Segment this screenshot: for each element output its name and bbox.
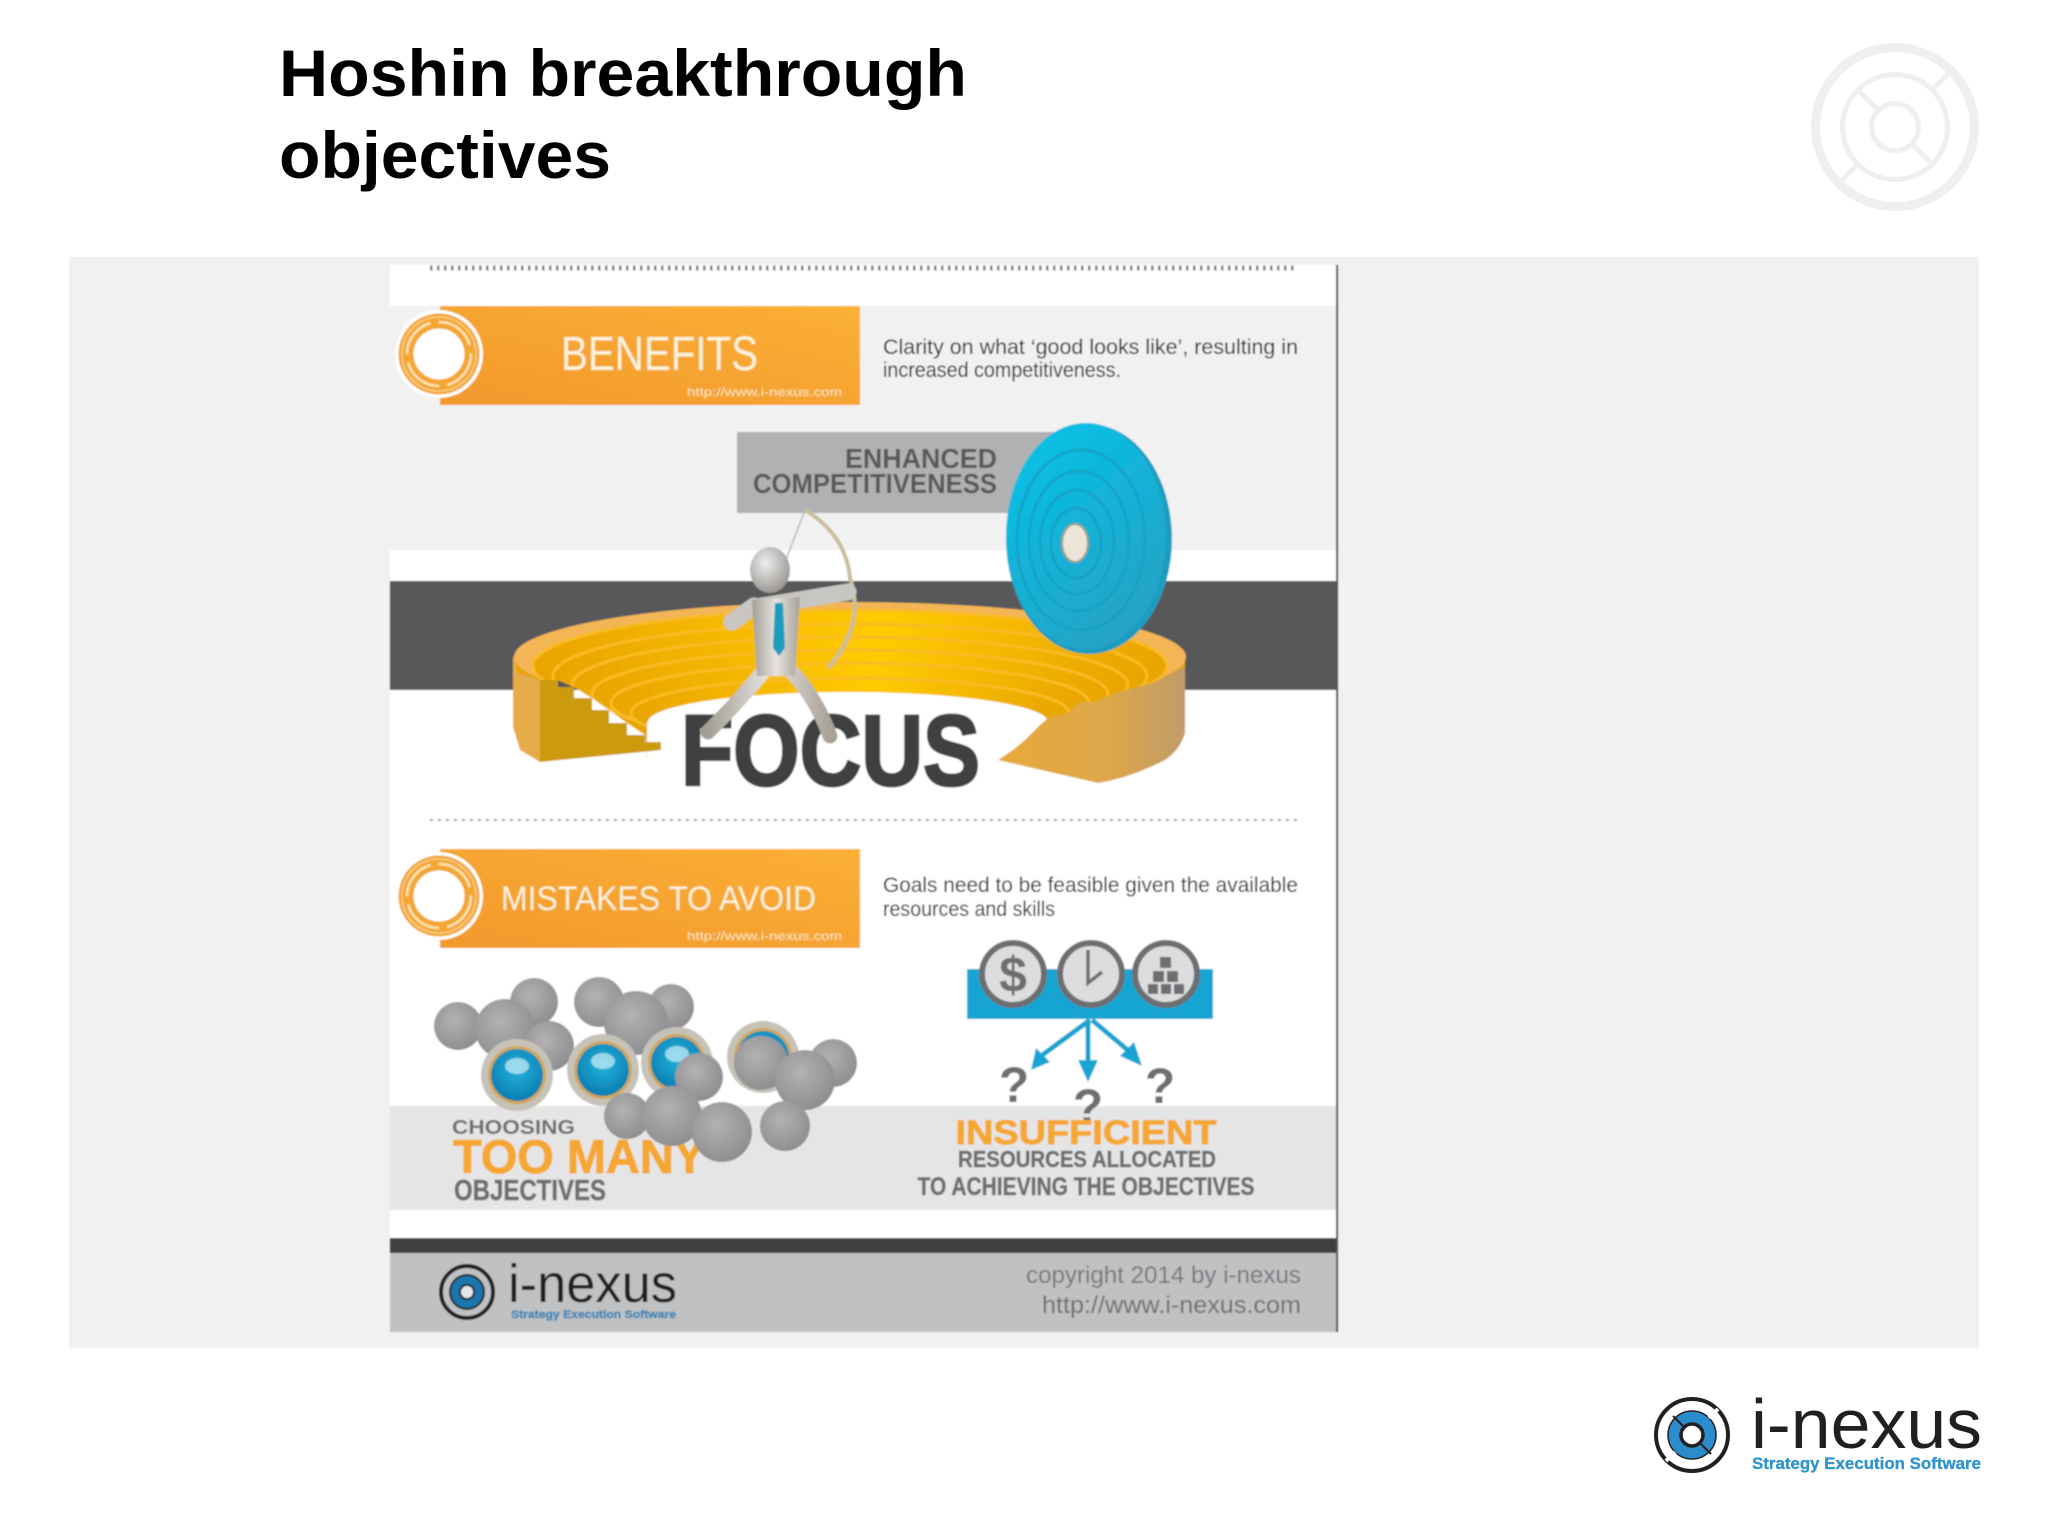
question marks: ? xyxy=(999,1057,1029,1113)
bow string xyxy=(784,510,805,565)
back spheres xyxy=(434,977,694,1071)
blue resource bar xyxy=(967,969,1213,1019)
benefits heading: BENEFITS xyxy=(561,328,758,381)
choosing too many objectives caption: CHOOSING xyxy=(452,1117,575,1139)
mistakes description: Goals need to be feasible given the available xyxy=(883,874,1298,897)
arena left cut face xyxy=(540,680,661,762)
dark focus band xyxy=(390,581,1337,690)
copyright text xyxy=(1026,1262,1301,1319)
choosing too many objectives caption: TOO MANY xyxy=(453,1130,705,1183)
copyright text: http://www.i-nexus.com xyxy=(1042,1292,1301,1319)
panel: grey slide backdrop xyxy=(69,257,1979,1348)
icon: stacked blocks xyxy=(1135,943,1197,1005)
insufficient resources caption: RESOURCES ALLOCATED xyxy=(958,1146,1216,1172)
enhanced competitiveness label: COMPETITIVENESS xyxy=(753,468,997,499)
mistakes description xyxy=(883,874,1298,921)
middle dotted rule xyxy=(430,819,1297,821)
arena left wall xyxy=(513,657,540,762)
arena steps xyxy=(513,602,1186,762)
benefits section band xyxy=(390,306,1337,550)
tie xyxy=(773,603,785,656)
top dotted rule xyxy=(430,266,1297,270)
medallions xyxy=(481,1021,799,1111)
arrows xyxy=(1031,1020,1142,1082)
icon: watermark target logo xyxy=(1816,48,1974,206)
icon: clock xyxy=(1060,943,1122,1005)
choosing too many objectives caption: OBJECTIVES xyxy=(454,1175,606,1207)
icon: logo mark xyxy=(1656,1399,1728,1471)
target disc xyxy=(1006,423,1172,654)
focus word: FOCUS xyxy=(681,695,980,807)
title: objectives xyxy=(279,118,611,192)
front spheres xyxy=(604,1036,857,1162)
bow xyxy=(805,510,855,668)
wordmark: i-nexus xyxy=(1751,1385,1982,1463)
right page edge xyxy=(1336,265,1338,1332)
infographic page background xyxy=(390,265,1337,1332)
mistakes banner xyxy=(395,849,860,948)
target centre xyxy=(1062,524,1088,562)
archer figure xyxy=(708,510,855,736)
copyright text: copyright 2014 by i-nexus xyxy=(1026,1262,1301,1289)
stepped golden arena xyxy=(513,602,1186,783)
benefits description xyxy=(883,336,1298,382)
question marks: ? xyxy=(1073,1079,1103,1135)
title xyxy=(279,36,967,192)
enhanced competitiveness label: ENHANCED xyxy=(845,443,997,474)
insufficient resources caption: TO ACHIEVING THE OBJECTIVES xyxy=(918,1173,1254,1201)
arena right face xyxy=(998,657,1185,783)
bow arm xyxy=(732,592,848,622)
question marks: ? xyxy=(1145,1058,1175,1114)
sphere cluster xyxy=(434,977,857,1162)
insufficient resources caption: INSUFFICIENT xyxy=(956,1114,1217,1152)
icon: orange ring xyxy=(395,852,483,940)
benefits banner xyxy=(395,306,860,405)
i-nexus corporate logo xyxy=(1656,1385,1982,1473)
title: Hoshin breakthrough xyxy=(279,36,967,110)
icon: orange ring xyxy=(395,310,483,398)
insufficient resources caption xyxy=(918,1114,1254,1201)
benefits description: Clarity on what ‘good looks like’, resulting in xyxy=(883,336,1298,359)
footer tagline: Strategy Execution Software xyxy=(511,1309,676,1321)
mistakes description: resources and skills xyxy=(883,898,1055,921)
tagline: Strategy Execution Software xyxy=(1752,1454,1981,1473)
resources diagram xyxy=(967,943,1213,1135)
legs xyxy=(708,668,830,736)
footer grey panel xyxy=(390,1253,1337,1332)
banner url: http://www.i-nexus.com xyxy=(687,929,842,943)
footer wordmark: i-nexus xyxy=(508,1254,677,1314)
choosing too many objectives caption xyxy=(452,1117,705,1207)
question marks xyxy=(999,1057,1175,1135)
footer logo xyxy=(441,1254,677,1321)
torso xyxy=(752,597,800,676)
mistakes heading: MISTAKES TO AVOID xyxy=(501,880,816,918)
panel: infographic xyxy=(390,265,1338,1332)
mistakes lower grey band xyxy=(390,1106,1337,1210)
head xyxy=(750,547,790,593)
icon: dollar: $ xyxy=(999,947,1027,1003)
banner url: http://www.i-nexus.com xyxy=(687,385,842,399)
enhanced competitiveness label xyxy=(737,432,1057,513)
icon: dollar xyxy=(982,943,1044,1005)
benefits description: increased competitiveness. xyxy=(883,359,1121,382)
icon: logo mark xyxy=(441,1266,493,1318)
footer dark bar xyxy=(390,1238,1337,1253)
